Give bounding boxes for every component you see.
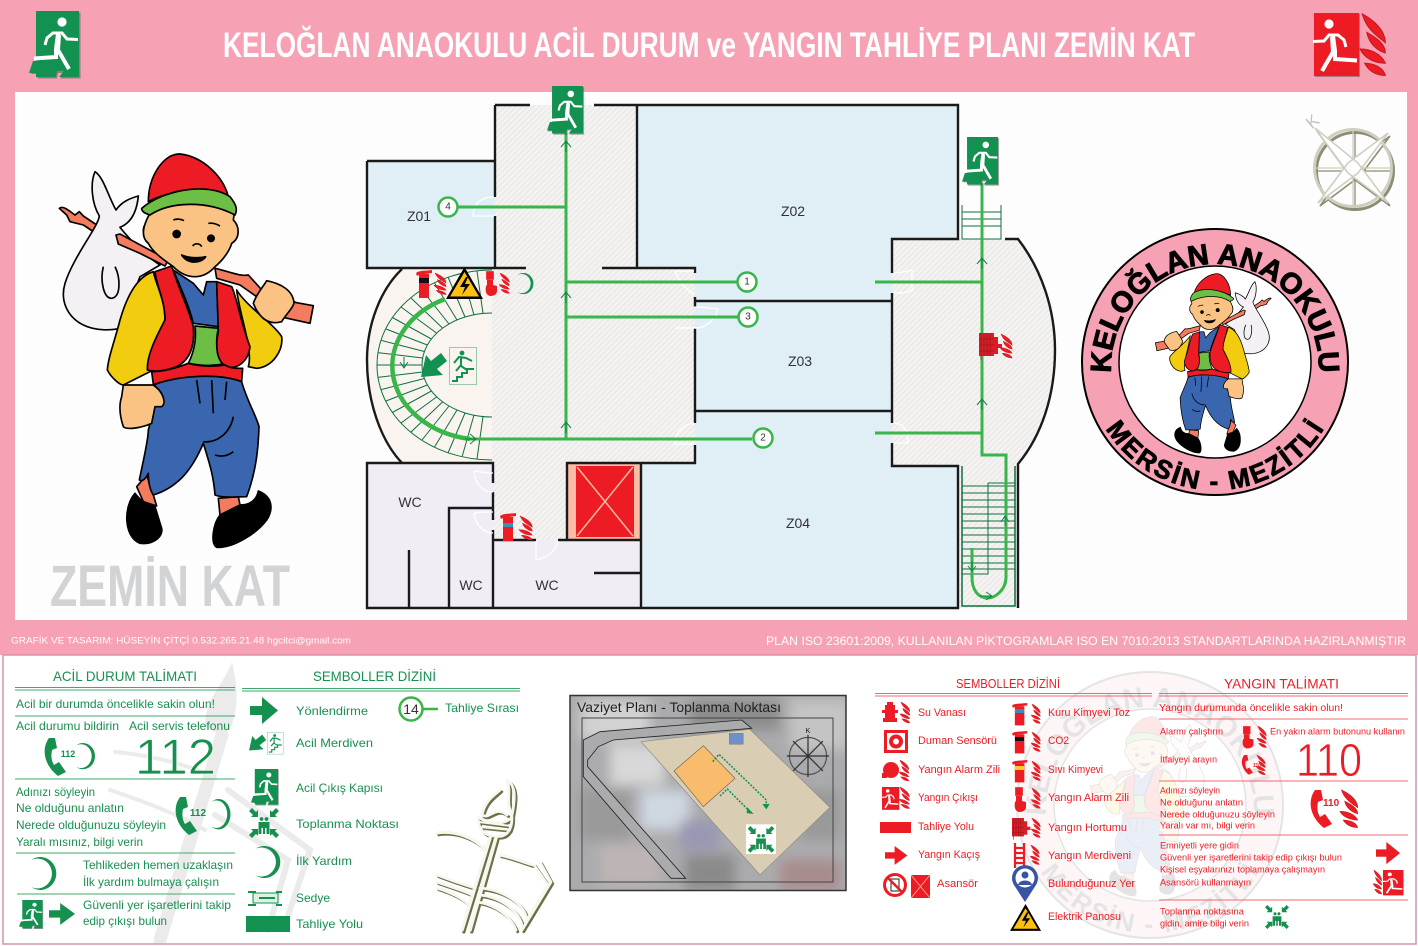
label: Yönlendirme bbox=[296, 704, 368, 718]
calm text: Acil bir durumda öncelikle sakin olun! bbox=[16, 697, 215, 711]
alarm text: Alarmı çalıştırın bbox=[1160, 726, 1223, 738]
caller instructions bbox=[1160, 786, 1275, 832]
icon: alarm button bbox=[1015, 787, 1040, 812]
assembly text: gidin, amire bilgi verin bbox=[1160, 918, 1249, 930]
fire brigade text: İtfaiyeyi arayın bbox=[1160, 754, 1217, 766]
icon: exit sign small bbox=[19, 900, 43, 929]
spiral staircase bbox=[367, 268, 492, 463]
heading: SEMBOLLER DİZİNİ bbox=[313, 667, 436, 684]
move away text bbox=[83, 858, 233, 889]
label: Asansör bbox=[937, 878, 978, 890]
sequence marker 2 bbox=[754, 428, 772, 448]
door swings bbox=[473, 197, 912, 560]
caller instructions: Adınızı söyleyin bbox=[1160, 786, 1220, 796]
route arrowheads bbox=[747, 804, 770, 814]
move away text: İlk yardım bulmaya çalışın bbox=[83, 875, 219, 889]
label: Duman Sensörü bbox=[918, 735, 997, 747]
evacuation text: Asansörü kullanmayın bbox=[1160, 878, 1251, 888]
sequence marker 4: 4 bbox=[445, 202, 451, 212]
icon: emergency stairs bbox=[421, 348, 476, 384]
icon: extinguisher and flame upper bbox=[416, 270, 446, 298]
label: Yangın Kaçış bbox=[918, 849, 980, 861]
evacuation text: Güvenli yer işaretlerini takip edip çıkışı bulun bbox=[1160, 852, 1342, 864]
icon: phone 112 large bbox=[176, 797, 230, 835]
label: İlk Yardım bbox=[296, 854, 352, 868]
site compass: K bbox=[806, 728, 811, 735]
main plan panel bbox=[15, 92, 1407, 620]
heading: SEMBOLLER DİZİNİ bbox=[956, 677, 1060, 691]
icon: alarm button bbox=[1243, 726, 1266, 748]
school logo: MERSİN - MEZİTLİ bbox=[1106, 417, 1324, 490]
sequence marker 1 bbox=[738, 272, 756, 292]
label: Bulunduğunuz Yer bbox=[1048, 878, 1135, 890]
watermark: ministry torch bbox=[110, 662, 310, 940]
follow signs text: Güvenli yer işaretlerini takip bbox=[83, 898, 231, 912]
label: Yangın Hortumu bbox=[1048, 822, 1127, 834]
icon: dry powder extinguisher bbox=[1012, 703, 1040, 725]
icon: fire phone large: 110 bbox=[1323, 798, 1340, 809]
nearest alarm text: En yakın alarm butonunu kullanın bbox=[1270, 726, 1405, 738]
walls bbox=[367, 105, 1055, 608]
outer stairs bottom bbox=[962, 466, 1015, 606]
icon: assembly point bbox=[1265, 905, 1289, 929]
label: Kuru Kimyevi Toz bbox=[1048, 707, 1130, 719]
icon: right exit sign bbox=[962, 137, 999, 186]
assembly sign bbox=[746, 824, 776, 854]
watermark: school logo bbox=[1016, 671, 1284, 939]
mascot: Keloğlan bbox=[59, 154, 313, 547]
panel: green symbol index bbox=[242, 667, 520, 932]
label: Yangın Alarm Zili bbox=[918, 764, 1000, 776]
sequence marker 2: 2 bbox=[760, 432, 766, 444]
room label WC: WC bbox=[398, 494, 422, 510]
icon: phone 112 small: 112 bbox=[61, 749, 75, 759]
icon: fire hose bbox=[1012, 818, 1040, 840]
sequence marker 4 bbox=[438, 198, 458, 216]
floor label: ZEMİN KAT: ZEMİN KAT bbox=[50, 554, 290, 619]
label: Acil Çıkış Kapısı bbox=[296, 781, 383, 795]
sequence marker 3: 3 bbox=[745, 312, 751, 322]
heading: ACİL DURUM TALİMATI bbox=[53, 667, 197, 684]
evacuation routes bbox=[713, 754, 766, 809]
label: Tahliye Sırası bbox=[445, 701, 519, 715]
icon: direction arrow bbox=[250, 697, 278, 724]
icon: fire exit bbox=[1373, 870, 1404, 896]
icon: crescent bbox=[31, 857, 56, 890]
icon: extinguisher and flame lower bbox=[500, 513, 532, 541]
icon: fire arrow bbox=[1376, 842, 1400, 864]
icon: exit door bbox=[251, 769, 279, 805]
room label Z02: Z02 bbox=[781, 203, 805, 219]
room label Z04: Z04 bbox=[786, 515, 810, 531]
icon: route swatch bbox=[880, 822, 911, 833]
caller instructions: Yaralı mısınız, bilgi verin bbox=[16, 835, 143, 849]
caller instructions: Ne olduğunu anlatın bbox=[16, 801, 124, 815]
label: Yangın Çıkışı bbox=[918, 792, 978, 804]
follow signs text bbox=[83, 898, 231, 928]
assembly text bbox=[1160, 906, 1249, 930]
floor plan bbox=[367, 86, 1055, 608]
compass bbox=[1302, 110, 1394, 210]
icon: alarm bell bbox=[882, 760, 909, 781]
caller instructions: Nerede olduğunuzu söyleyin bbox=[1160, 810, 1275, 820]
emergency number: 112 bbox=[135, 729, 216, 785]
route direction arrows bbox=[400, 141, 1009, 600]
icon: electric panel bbox=[1010, 904, 1041, 931]
icon: phone 112 small bbox=[45, 738, 95, 776]
room label Z01: Z01 bbox=[407, 208, 431, 224]
room label Z03: Z03 bbox=[788, 353, 812, 369]
room label WC: WC bbox=[459, 577, 483, 593]
instructions panel bbox=[3, 655, 1416, 944]
icon: CO2 extinguisher bbox=[1012, 731, 1040, 753]
caller instructions: Yaralı var mı, bilgi verin bbox=[1160, 820, 1255, 832]
rooms: classrooms bbox=[367, 105, 958, 608]
icon: route swatch bbox=[246, 916, 290, 932]
icon: sequence marker: 14 bbox=[403, 701, 419, 717]
icon: liquid chemical extinguisher bbox=[1012, 760, 1040, 782]
move away text: Tehlikeden hemen uzaklaşın bbox=[83, 858, 233, 872]
icon: elevator prohibition bbox=[884, 874, 906, 896]
school building bbox=[674, 746, 735, 807]
site plan title: Vaziyet Planı - Toplanma Noktası bbox=[577, 699, 781, 715]
icon: sequence marker bbox=[400, 698, 438, 720]
elevator bbox=[567, 463, 641, 540]
panel: red symbol index bbox=[875, 677, 1152, 931]
heading: YANGIN TALİMATI bbox=[1224, 676, 1339, 692]
label: Toplanma Noktası bbox=[296, 817, 399, 831]
road bbox=[583, 720, 752, 878]
icon: phone 112 large: 112 bbox=[190, 808, 207, 819]
label: Tahliye Yolu bbox=[918, 821, 974, 833]
icon: fire exit bbox=[882, 787, 909, 810]
icon: emergency stairs bbox=[249, 732, 283, 754]
outer stairs top bbox=[962, 205, 1001, 239]
label: Yangın Merdiveni bbox=[1048, 850, 1131, 862]
standards note: PLAN ISO 23601:2009, KULLANILAN PİKTOGRAMLAR ISO EN 7010:2013 STANDARTLARINDA HAZIRLANMIŞTIR bbox=[766, 634, 1406, 648]
sequence marker 3 bbox=[738, 308, 758, 326]
label: Su Vanası bbox=[918, 707, 966, 719]
icon: fire ladder bbox=[1015, 843, 1039, 868]
fire number: 110 bbox=[1296, 734, 1362, 786]
icon: water valve bbox=[882, 702, 910, 723]
icon: fire phone large bbox=[1311, 790, 1358, 828]
evacuation text bbox=[1160, 840, 1342, 888]
compass: K bbox=[1302, 110, 1324, 133]
icon: electric panel bbox=[446, 267, 483, 299]
caller instructions: Adınızı söyleyin bbox=[16, 785, 95, 799]
follow signs text: edip çıkışı bulun bbox=[83, 914, 167, 928]
label: CO2 bbox=[1048, 735, 1069, 747]
icon: arrow bbox=[49, 903, 75, 925]
corridors bbox=[492, 105, 1055, 608]
ministry emblem bbox=[437, 780, 553, 932]
icon: fire phone small bbox=[1242, 755, 1265, 775]
site compass bbox=[787, 728, 829, 777]
icon: fire phone small: 110 bbox=[1253, 763, 1261, 769]
school plot bbox=[641, 729, 830, 875]
icon: fire escape arrow bbox=[885, 846, 907, 865]
evacuation routes bbox=[392, 133, 1006, 598]
report text: Acil durumu bildirin bbox=[16, 719, 119, 733]
school logo bbox=[1081, 228, 1349, 496]
label: Yangın Alarm Zili bbox=[1048, 792, 1129, 804]
pink header and main frame bbox=[0, 0, 1418, 655]
evacuation text: Emniyetli yere gidin bbox=[1160, 840, 1239, 852]
label: Sıvı Kimyevi bbox=[1048, 764, 1103, 776]
icon: alarm button and flame bbox=[486, 271, 509, 296]
school logo: KELOĞLAN ANAOKULU bbox=[1090, 244, 1340, 372]
icon: red fire exit with flame bbox=[1313, 13, 1385, 77]
service phone label: Acil servis telefonu bbox=[129, 719, 230, 733]
icon: crescent bbox=[255, 846, 280, 878]
site plan panel bbox=[569, 695, 850, 891]
label: Tahliye Yolu bbox=[296, 917, 363, 931]
icon: elevator bbox=[911, 875, 930, 898]
icon: smoke sensor bbox=[884, 730, 908, 753]
evacuation text: Kişisel eşyalarınızı toplamaya çalışmayın bbox=[1160, 864, 1325, 876]
caller instructions bbox=[16, 785, 166, 849]
label: Acil Merdiven bbox=[296, 736, 373, 750]
room label WC: WC bbox=[535, 577, 559, 593]
watermark: school logo: MERSİN - MEZİTLİ bbox=[1042, 861, 1258, 932]
designer credit: GRAFİK VE TASARIM: HÜSEYİN ÇİTÇİ 0.532.265.21.48 hgcitci@gmail.com bbox=[11, 636, 351, 646]
aerial background bbox=[569, 695, 850, 891]
icon: fire hose bbox=[979, 333, 1012, 360]
watermark: school logo: KELOĞLAN ANAOKULU bbox=[1026, 687, 1274, 814]
icon: stretcher bbox=[248, 892, 282, 905]
rooms: WC bbox=[367, 463, 641, 608]
assembly text: Toplanma noktasına bbox=[1160, 906, 1245, 918]
icon: assembly point bbox=[249, 808, 279, 838]
label: Sedye bbox=[296, 891, 330, 905]
icon: first aid crescent bbox=[518, 273, 533, 294]
icon: green exit sign bbox=[29, 11, 80, 78]
service building bbox=[729, 733, 743, 744]
panel: emergency instructions bbox=[15, 667, 235, 929]
label: Elektrik Panosu bbox=[1048, 911, 1121, 923]
caller instructions: Ne olduğunu anlatın bbox=[1160, 798, 1243, 808]
icon: top exit sign bbox=[547, 86, 584, 135]
sequence marker 1: 1 bbox=[744, 276, 750, 288]
calm text: Yangın durumunda öncelikle sakin olun! bbox=[1159, 702, 1343, 714]
panel: fire instructions bbox=[1159, 676, 1408, 930]
caller instructions: Nerede olduğunuzu söyleyin bbox=[16, 818, 166, 832]
icon: location pin bbox=[1012, 865, 1038, 902]
